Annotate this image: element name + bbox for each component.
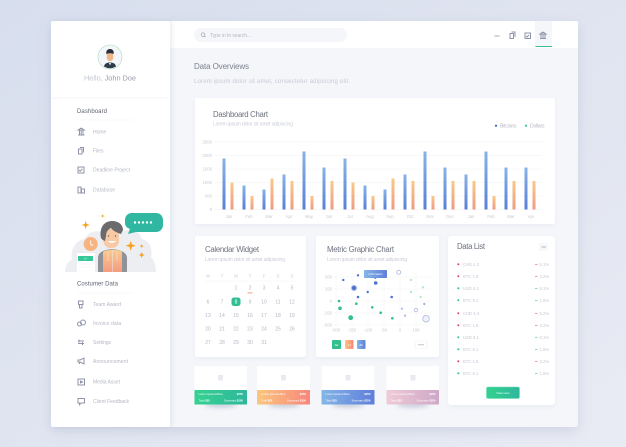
search box: Type in to search... xyxy=(210,33,251,39)
file badges xyxy=(332,340,366,349)
item: home: Home xyxy=(93,130,107,136)
y axis grid xyxy=(203,140,542,212)
calendar title: Calendar Widget xyxy=(205,245,260,254)
y axis grid: 1000 xyxy=(203,180,213,185)
search box xyxy=(194,28,347,42)
card: orange: Summary $250 xyxy=(287,398,306,402)
calendar days: 13 xyxy=(205,313,211,319)
scatter grid: 100 xyxy=(412,328,420,332)
y axis grid: 2000 xyxy=(203,153,213,158)
row 9: 3.2% xyxy=(540,359,549,364)
more button xyxy=(415,341,427,348)
scatter grid: -50 xyxy=(381,328,388,332)
row 5: 5.2% xyxy=(540,311,549,316)
item: database: Database xyxy=(93,188,115,194)
selected day xyxy=(232,298,240,306)
calendar days: 16 xyxy=(247,313,253,319)
card: blue: Summary $250 xyxy=(352,398,371,402)
calendar days: 23 xyxy=(247,326,253,332)
view more button: View more xyxy=(496,391,510,395)
row 3 xyxy=(457,286,549,291)
card: orange: Lorem Ipsumd Dice xyxy=(261,392,286,396)
file badges: AI xyxy=(348,343,351,347)
greeting: Hello, John Doe xyxy=(84,74,136,82)
card: blue: Total $25 xyxy=(326,398,337,402)
row 5 xyxy=(457,311,549,316)
scatter grid: 250 xyxy=(325,286,333,292)
blue data points xyxy=(342,274,393,298)
weekday header: T xyxy=(221,274,224,278)
calendar days: 12 xyxy=(289,299,295,305)
active tab xyxy=(535,21,552,47)
row 4: 1.5% xyxy=(540,298,549,303)
row 6 xyxy=(457,323,549,328)
event marker xyxy=(248,292,252,294)
scatter grid xyxy=(324,272,431,332)
x axis labels: Jan xyxy=(226,214,233,219)
item: deadline project: Deadline Project xyxy=(93,168,131,174)
row 2: 3.2% xyxy=(540,274,549,279)
card: pink: Summary $250 xyxy=(417,398,436,402)
calendar days: 17 xyxy=(261,313,267,319)
row 5: CHD 4.4 xyxy=(463,311,480,316)
x axis labels: Mar xyxy=(265,214,273,219)
item: files: Files xyxy=(93,148,104,154)
payment cards xyxy=(194,366,439,408)
weekday header: W xyxy=(234,274,238,278)
item: media asset: Media Asset xyxy=(93,380,121,386)
y axis grid: 1500 xyxy=(203,166,213,172)
scatter grid: -500 xyxy=(332,328,341,332)
row 4 xyxy=(457,298,549,303)
file badges: AE xyxy=(335,343,338,347)
cloud backdrop xyxy=(65,228,156,272)
y axis grid: 2500 xyxy=(203,140,213,144)
menu: dashboard xyxy=(78,128,131,194)
card: green: Total $25 xyxy=(198,398,210,402)
card: green: Summary $250 xyxy=(224,398,243,402)
calendar days: 20 xyxy=(205,326,211,332)
icon: clock xyxy=(84,237,98,251)
row 8 xyxy=(457,347,549,352)
calendar days: 2 xyxy=(249,286,252,292)
icon: files xyxy=(510,32,515,38)
heading: costumer data: Costumer Data xyxy=(77,282,119,288)
card: orange: Total $25 xyxy=(261,398,273,402)
row 3: 6.1% xyxy=(540,286,549,291)
calendar days: 1 xyxy=(235,286,238,292)
row 8: 1.5% xyxy=(540,347,549,352)
calendar days: 28 xyxy=(219,340,225,346)
x axis labels: Nov xyxy=(426,214,435,219)
weekday header: S xyxy=(277,274,280,278)
calendar days: 14 xyxy=(219,313,225,319)
item: announcement: Announcement xyxy=(93,359,129,365)
x axis labels: Apr xyxy=(528,214,535,219)
row 8: BTC 9.1 xyxy=(463,347,479,352)
row 10: BTC 9.1 xyxy=(463,371,479,376)
card: pink: Lorem Ipsumd Dice xyxy=(390,392,415,396)
scatter grid: -100 xyxy=(364,328,373,332)
row 1: 5.1% xyxy=(540,262,549,267)
panel: metric graphic chart xyxy=(316,236,439,357)
x axis labels xyxy=(226,214,535,219)
calendar days: 9 xyxy=(249,299,252,305)
file badges: XF xyxy=(359,343,363,347)
calendar days: 15 xyxy=(233,313,239,319)
y axis grid: 0 xyxy=(210,207,213,212)
calendar days: 10 xyxy=(261,299,267,305)
calendar days: 21 xyxy=(219,326,225,332)
icon: more menu xyxy=(494,35,500,37)
item: client feedback: Client Feedback xyxy=(93,399,130,405)
document xyxy=(77,253,95,272)
card: blue: Lorem Ipsumd Dice xyxy=(326,392,350,396)
green data points xyxy=(338,300,394,320)
row 2: BTC 1.8 xyxy=(463,274,479,279)
list title: Data List xyxy=(457,242,486,251)
scatter grid: -250 xyxy=(324,310,333,316)
chart subtitle: Lorem ipsum dolor sit amet adipiscing xyxy=(213,122,293,128)
illustration: support person xyxy=(65,213,163,272)
calendar days: 29 xyxy=(233,340,239,346)
weekday header: S xyxy=(291,274,294,278)
x axis labels: Jan xyxy=(468,214,475,219)
list menu xyxy=(539,243,548,251)
panel: dashboard chart xyxy=(195,98,555,224)
sidebar xyxy=(51,21,170,427)
legend: Bitcoins xyxy=(500,123,517,129)
top bar xyxy=(170,21,578,48)
x axis labels: Apr xyxy=(286,214,293,219)
calendar days: 26 xyxy=(289,326,295,332)
calendar days: 8 xyxy=(235,299,238,305)
card: blue: $250 xyxy=(364,392,371,396)
card: green: Lorem Ipsumd Dice xyxy=(198,392,223,396)
card: green: $250 xyxy=(237,392,243,396)
item: invoice data: Invoice data xyxy=(93,321,121,327)
heading: dashboard: Dashboard xyxy=(77,109,107,115)
scatter grid: 500 xyxy=(325,274,333,280)
metric subtitle: Lorem ipsum dolor sit amet adipiscing xyxy=(327,257,407,263)
menu: costumer data xyxy=(78,301,130,405)
weekday header: F xyxy=(263,274,266,278)
x axis labels: Jul xyxy=(347,214,353,219)
row 7: 6.1% xyxy=(540,335,549,340)
tooltip: Information xyxy=(368,272,383,276)
weekday header: T xyxy=(249,274,252,278)
avatar xyxy=(98,45,122,69)
card: blue xyxy=(322,366,374,408)
card: pink: $250 xyxy=(429,392,436,396)
row 6: BTC 1.8 xyxy=(463,323,479,328)
card: orange xyxy=(257,366,310,408)
row 4: BTC 9.1 xyxy=(463,298,479,303)
scatter grid: -250 xyxy=(348,328,357,332)
x axis labels: Feb xyxy=(245,214,253,219)
calendar days: 24 xyxy=(261,326,267,332)
x axis labels: Sep xyxy=(386,214,394,219)
x axis labels: Feb xyxy=(487,214,495,219)
calendar days: 25 xyxy=(275,326,281,332)
row 10 xyxy=(457,371,549,376)
x axis labels: Oct xyxy=(407,214,414,219)
pale data points xyxy=(397,270,429,322)
sparkles xyxy=(82,214,145,258)
card: pink xyxy=(386,366,439,408)
calendar days: 31 xyxy=(261,340,267,346)
row 9: BTC 1.8 xyxy=(463,359,479,364)
calendar days: 3 xyxy=(263,286,266,292)
calendar days: 4 xyxy=(277,286,280,292)
view more button xyxy=(486,387,520,398)
x axis labels: Jun xyxy=(326,214,333,219)
weekday header: M xyxy=(206,274,210,278)
calendar days: 19 xyxy=(289,313,295,319)
row 9 xyxy=(457,359,549,364)
row 10: 1.5% xyxy=(540,371,549,376)
calendar subtitle: Lorem ipsum dolor sit amet adipiscing xyxy=(205,257,285,263)
list rows xyxy=(457,262,549,376)
calendar days: 27 xyxy=(205,340,211,346)
calendar days: 30 xyxy=(247,340,253,346)
page subheading: Lorem ipsum dolor sit amet, consectetur adipiscing elit. xyxy=(194,79,350,85)
scatter grid: 0 xyxy=(330,298,333,304)
row 3: USD 6.1 xyxy=(463,286,479,291)
row 1: CHD 4.3 xyxy=(463,262,480,267)
x axis labels: Mar xyxy=(507,214,515,219)
weekday header xyxy=(206,274,294,278)
bars: bitcoins xyxy=(222,152,528,210)
metric title: Metric Graphic Chart xyxy=(327,245,395,254)
x axis labels: Aug xyxy=(366,214,374,219)
row 1 xyxy=(457,262,549,267)
calendar days: 6 xyxy=(207,299,210,305)
panel: data list xyxy=(448,236,555,405)
x axis labels: Dec xyxy=(446,214,454,219)
panel: calendar widget xyxy=(195,236,306,357)
card: pink: Total $25 xyxy=(390,398,402,402)
bars: dollars xyxy=(230,178,536,210)
calendar days: 5 xyxy=(291,286,294,292)
calendar days: 11 xyxy=(275,299,281,305)
person xyxy=(98,221,127,272)
item: settings: Settings xyxy=(93,340,112,346)
scatter grid: -500 xyxy=(324,322,333,328)
chart title: Dashboard Chart xyxy=(213,110,269,119)
calendar days xyxy=(205,286,295,346)
speech bubble xyxy=(125,213,163,234)
row 7 xyxy=(457,335,549,340)
calendar days: 7 xyxy=(221,299,224,305)
card: orange: $250 xyxy=(300,392,306,396)
page heading: Data Overviews xyxy=(194,62,249,71)
dashboard window xyxy=(51,21,578,427)
legend xyxy=(495,123,545,129)
legend: Dollars xyxy=(530,123,545,129)
item: team award: Team Award xyxy=(93,302,121,308)
calendar days: 22 xyxy=(233,326,239,332)
row 7: USD 6.1 xyxy=(463,335,479,340)
scatter grid: 0 xyxy=(399,328,402,332)
x axis labels: May xyxy=(305,214,314,219)
card: green xyxy=(194,366,247,408)
calendar days: 18 xyxy=(275,313,281,319)
row 6: 3.2% xyxy=(540,323,549,328)
row 2 xyxy=(457,274,549,279)
y axis grid: 500 xyxy=(205,194,213,198)
icon: project xyxy=(525,33,530,38)
